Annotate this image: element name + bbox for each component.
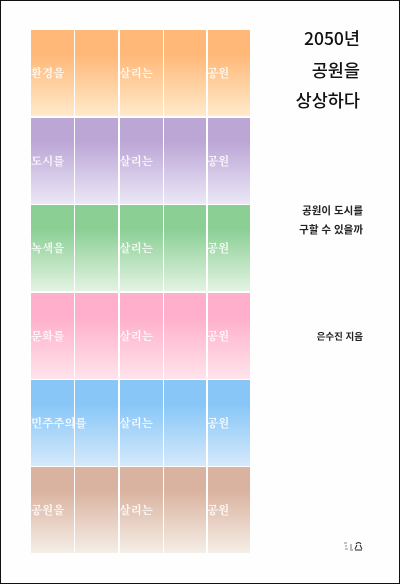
panel: orange row 환경을 살리는 공원: 살리는 xyxy=(120,65,153,81)
panel: orange row 환경을 살리는 공원: 공원 xyxy=(207,65,229,81)
panel: brown row 공원을 살리는 공원: 살리는 xyxy=(120,502,153,518)
panel: green row 녹색을 살리는 공원: 공원 xyxy=(207,240,229,256)
title: 2050년 xyxy=(304,26,360,51)
panel: purple row 도시를 살리는 공원 xyxy=(31,118,250,204)
panel: green row 녹색을 살리는 공원 xyxy=(31,205,250,291)
title: 상상하다 xyxy=(296,88,360,113)
panel: pink row 문화를 살리는 공원: 공원 xyxy=(207,328,229,344)
subtitle: 구할 수 있을까 xyxy=(299,222,363,237)
panel: purple row 도시를 살리는 공원: 살리는 xyxy=(120,153,153,169)
publisher logo xyxy=(344,542,362,550)
panel: purple row 도시를 살리는 공원: 공원 xyxy=(207,153,229,169)
panel: brown row 공원을 살리는 공원 xyxy=(31,467,250,553)
panel: pink row 문화를 살리는 공원: 살리는 xyxy=(120,328,153,344)
panel: blue row 민주주의를 살리는 공원 xyxy=(31,380,250,466)
author: 은수진 지음 xyxy=(317,329,363,343)
panel: green row 녹색을 살리는 공원: 녹색을 xyxy=(31,240,64,256)
panel: brown row 공원을 살리는 공원: 공원 xyxy=(207,502,229,518)
panel: green row 녹색을 살리는 공원: 살리는 xyxy=(120,240,153,256)
title: 공원을 xyxy=(312,58,360,83)
subtitle: 공원이 도시를 xyxy=(302,203,363,218)
panel: blue row 민주주의를 살리는 공원: 살리는 xyxy=(120,415,153,431)
panel: blue row 민주주의를 살리는 공원: 공원 xyxy=(207,415,229,431)
panel: purple row 도시를 살리는 공원: 도시를 xyxy=(31,153,64,169)
panel: orange row 환경을 살리는 공원: 환경을 xyxy=(31,65,64,81)
panel: brown row 공원을 살리는 공원: 공원을 xyxy=(31,502,64,518)
panel: pink row 문화를 살리는 공원 xyxy=(31,293,250,379)
subtitle xyxy=(299,203,363,237)
panel: blue row 민주주의를 살리는 공원: 민주주의를 xyxy=(31,415,87,431)
panel: orange row 환경을 살리는 공원 xyxy=(31,30,250,116)
title xyxy=(296,26,360,113)
panel: pink row 문화를 살리는 공원: 문화를 xyxy=(31,328,64,344)
